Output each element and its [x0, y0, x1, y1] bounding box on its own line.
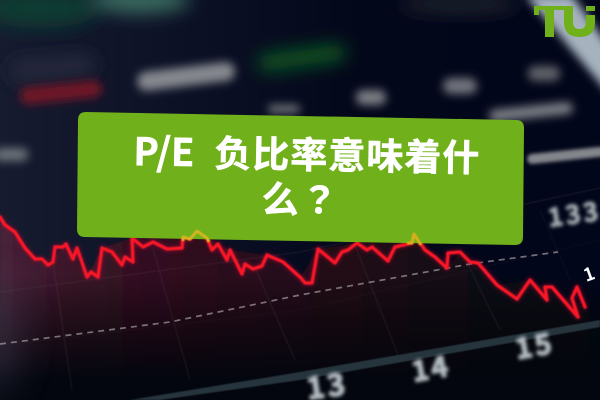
left edge vignette	[0, 275, 20, 395]
title line 1: P/E	[133, 121, 195, 177]
title line 1: 负比率意味着什	[214, 124, 480, 182]
axis number 14: 14	[408, 345, 454, 391]
chart grid lines	[0, 188, 600, 390]
line peak showing through card, left	[183, 231, 209, 242]
dashed average line	[0, 252, 558, 344]
axis number 15: 15	[512, 322, 557, 368]
panel: green title card	[77, 112, 524, 245]
logo: TU	[534, 6, 595, 37]
title line 2: 么	[261, 169, 299, 224]
area under the line	[0, 217, 600, 400]
bottom fade	[0, 275, 600, 380]
line peak showing through card, right	[407, 234, 421, 245]
title line 2	[261, 169, 338, 225]
title line 2: ？	[300, 170, 338, 225]
axis bar	[130, 320, 600, 400]
blurred ticker readouts	[0, 0, 600, 164]
blurred axis numbers	[303, 192, 600, 400]
red price line	[0, 217, 585, 317]
axis number 1: 1	[579, 260, 598, 288]
blurred diagonal light band	[525, 0, 600, 95]
